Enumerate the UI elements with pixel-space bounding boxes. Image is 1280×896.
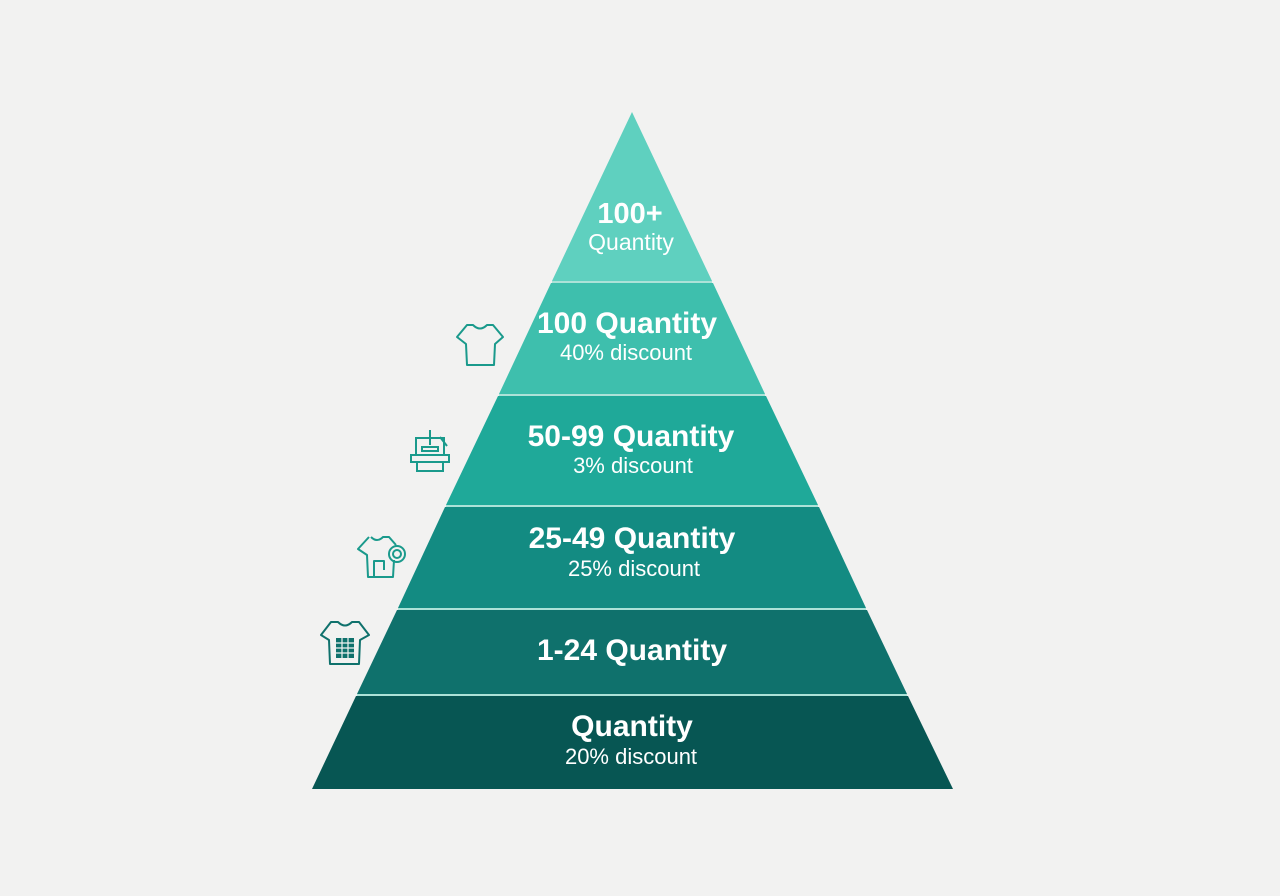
pyramid [312, 112, 953, 789]
tier 6: base [312, 696, 953, 789]
separators [357, 282, 907, 695]
tier 1: 100+ [552, 112, 712, 281]
tier 3: 50-99: 3% discount [573, 453, 693, 478]
tier 1: 100+: 100+ [597, 198, 663, 230]
tier 4: 25-49: 25% discount [568, 556, 700, 581]
tier 5: 1-24 [357, 610, 907, 694]
tier 3: 50-99: 50-99 Quantity [528, 420, 735, 453]
tier 4: 25-49 [398, 507, 866, 608]
tier 3: 50-99 [446, 396, 818, 505]
icon: t-shirt with grid [321, 622, 369, 664]
tier 2: 100 Quantity [499, 283, 765, 394]
tier 2: 100 Quantity: 40% discount [560, 340, 692, 365]
tier 5: 1-24: 1-24 Quantity [537, 634, 727, 667]
tier 6: base: Quantity [571, 710, 693, 743]
tier 6: base: 20% discount [565, 744, 697, 769]
icon: t-shirt with badge [358, 537, 405, 577]
tier 4: 25-49: 25-49 Quantity [529, 522, 736, 555]
icon: press [411, 430, 449, 471]
tier 2: 100 Quantity: 100 Quantity [537, 307, 717, 340]
tier 1: 100+: Quantity [588, 229, 674, 255]
icon: t-shirt [457, 325, 503, 365]
